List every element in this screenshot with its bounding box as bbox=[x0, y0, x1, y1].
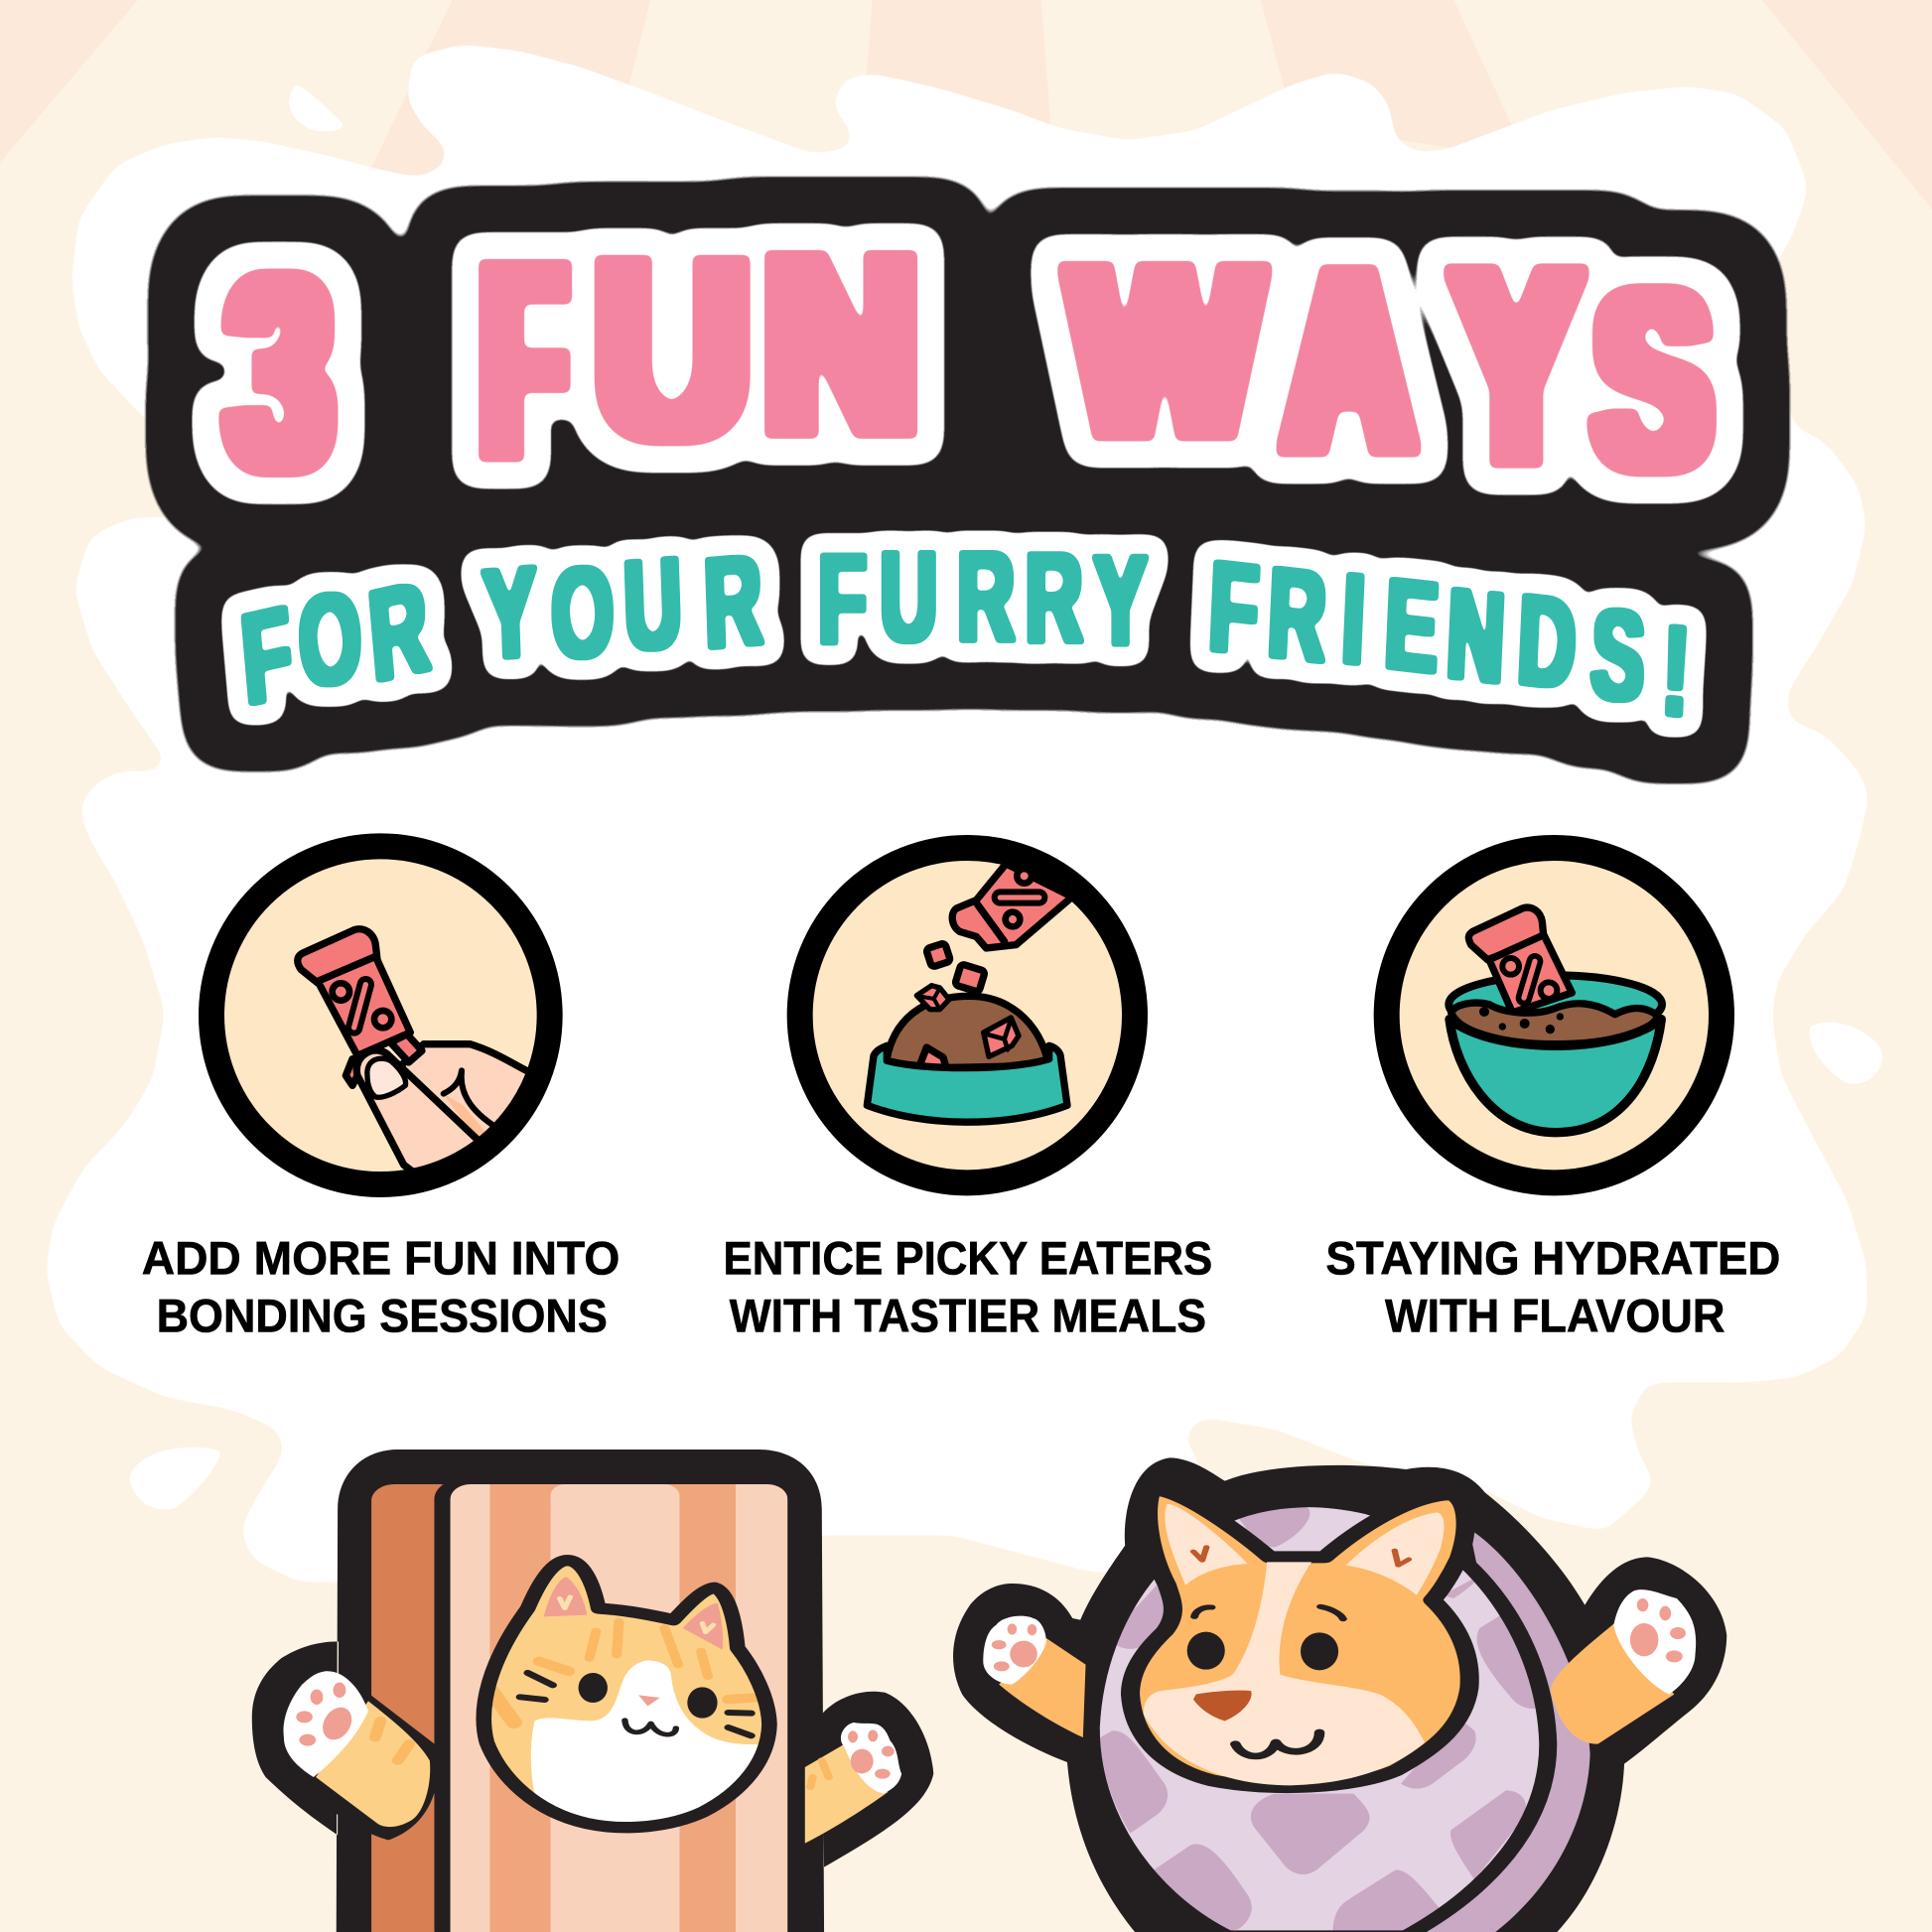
caption: hydration: WITH FLAVOUR bbox=[1385, 1290, 1725, 1342]
caption: hydration bbox=[1325, 1231, 1780, 1342]
cat in box bbox=[252, 1449, 933, 1932]
icon: topper on food bowl bbox=[800, 848, 1135, 1182]
caption: bonding sessions bbox=[142, 1231, 620, 1342]
title bbox=[228, 204, 1710, 744]
title line one: W bbox=[1071, 217, 1259, 485]
caption: picky eaters: ENTICE PICKY EATERS bbox=[724, 1231, 1212, 1284]
title line one: S bbox=[1595, 239, 1710, 521]
corgi in egg bbox=[953, 1457, 1726, 1932]
cat left arm bbox=[307, 1688, 439, 1840]
title line two bbox=[236, 525, 1692, 744]
title line one: F bbox=[483, 207, 563, 513]
milk splash bbox=[46, 45, 1882, 1583]
corgi head bbox=[1130, 1490, 1469, 1787]
caption: picky eaters bbox=[724, 1231, 1212, 1342]
icon: hand holding treat bbox=[211, 846, 550, 1184]
title line two: FOR bbox=[236, 554, 434, 732]
caption: hydration: STAYING HYDRATED bbox=[1325, 1231, 1780, 1284]
caption: bonding sessions: BONDING SESSIONS bbox=[157, 1290, 608, 1342]
title line one: UN bbox=[595, 204, 918, 490]
box stripes bbox=[451, 1484, 787, 1932]
title line two: YOUR bbox=[482, 527, 764, 687]
box outline bbox=[252, 1449, 933, 1932]
caption: bonding sessions: ADD MORE FUN INTO bbox=[142, 1231, 620, 1284]
corgi left arm bbox=[999, 1638, 1085, 1737]
caption: picky eaters: WITH TASTIER MEALS bbox=[730, 1290, 1206, 1342]
icon: treat in water bowl bbox=[1387, 848, 1722, 1182]
egg front bbox=[1091, 1501, 1548, 1932]
egg back bbox=[1406, 1529, 1590, 1932]
title line two: FURRY bbox=[818, 525, 1147, 672]
title line one: A bbox=[1286, 216, 1413, 505]
title line two: FRIENDS! bbox=[1206, 534, 1692, 744]
title line one: Y bbox=[1453, 212, 1579, 520]
cat head bbox=[483, 1561, 776, 1837]
corgi outline bbox=[953, 1457, 1726, 1932]
corgi right arm bbox=[1551, 1621, 1674, 1744]
cat right arm bbox=[805, 1744, 888, 1844]
title line one: 3 bbox=[228, 219, 332, 525]
title line one bbox=[228, 204, 1710, 525]
